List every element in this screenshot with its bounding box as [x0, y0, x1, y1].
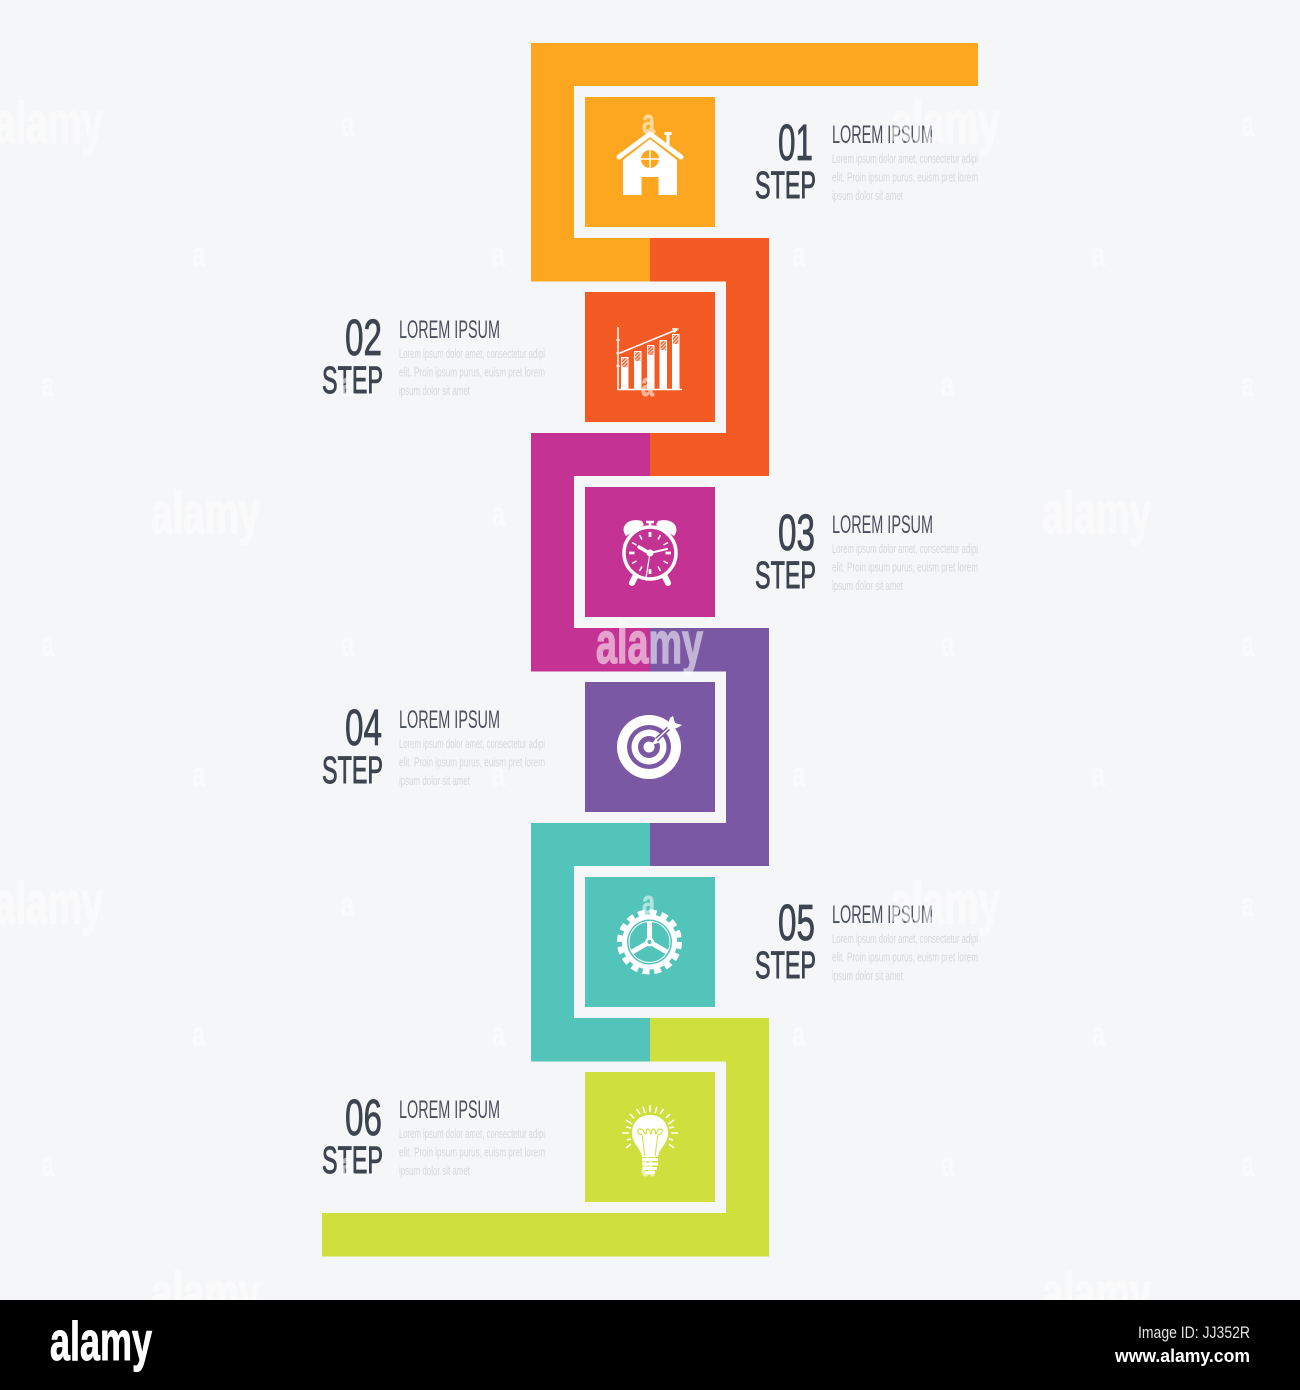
text block: step 5 [755, 894, 978, 987]
watermarks: a [1241, 1146, 1255, 1184]
connector band: step 4 purple [650, 628, 769, 866]
watermarks: alamy [1042, 481, 1151, 546]
tile: step 5 with gear icon [585, 877, 715, 1007]
watermarks: alamy [891, 871, 1000, 936]
icon: gear [620, 912, 679, 972]
text block: step 6: 06 [345, 1089, 382, 1146]
text block: step 6: ipsum dolor sit amet [399, 1163, 470, 1178]
text block: step 2: STEP [322, 360, 383, 402]
tile: step 1 with house icon [585, 97, 715, 227]
watermarks: a [792, 756, 806, 794]
text block: step 5: STEP [755, 945, 816, 987]
text block: step 3 [755, 504, 978, 597]
icon: alarm clock [624, 520, 676, 583]
watermarks: alamy [596, 611, 703, 676]
watermarks: a [642, 103, 656, 141]
watermarks: a [41, 366, 55, 404]
watermarks: a [941, 626, 955, 664]
tile: step 4 with target icon [585, 682, 715, 812]
text block: step 3: elit. Proin ipsum purus, euism pret lorem [832, 560, 978, 574]
tile: step 3 with clock icon [585, 487, 715, 617]
watermarks: a [1241, 886, 1255, 924]
watermarks: a [641, 1146, 655, 1184]
watermarks: a [192, 1016, 206, 1054]
tile: step 2 with chart icon [585, 292, 715, 422]
text block: step 6: LOREM IPSUM [399, 1096, 500, 1124]
footer image id: Image ID: JJ352R [1138, 1323, 1250, 1342]
text block: step 5: 05 [778, 894, 815, 951]
watermarks: a [192, 236, 206, 274]
footer bar [0, 1300, 1300, 1390]
text block: step 1: ipsum dolor sit amet [832, 188, 903, 203]
watermarks: a [1092, 756, 1106, 794]
connector band: step 2 red [650, 238, 769, 476]
watermarks: a [192, 756, 206, 794]
watermarks: a [1241, 626, 1255, 664]
text block: step 3: LOREM IPSUM [832, 511, 933, 539]
text block: step 2: Lorem ipsum dolor amet, consectetur adipi [399, 346, 545, 361]
watermarks: a [641, 366, 655, 404]
footer website: www.alamy.com [1114, 1346, 1250, 1366]
text block: step 1: LOREM IPSUM [832, 121, 933, 149]
watermarks: a [492, 1016, 506, 1054]
text block: step 2: ipsum dolor sit amet [399, 383, 470, 398]
text block: step 1: elit. Proin ipsum purus, euism pret lorem [832, 170, 978, 184]
watermarks: a [341, 626, 355, 664]
watermarks: a [1092, 1016, 1106, 1054]
text block: step 6: elit. Proin ipsum purus, euism pret lorem [399, 1144, 545, 1160]
connector band: step 1 orange [531, 43, 978, 282]
text block: step 2: 02 [345, 309, 382, 366]
watermarks: a [341, 106, 355, 144]
text block: step 4: Lorem ipsum dolor amet, consectetur adipi [399, 736, 545, 751]
connector band: step 5 teal [531, 823, 650, 1062]
watermarks: alamy [151, 1261, 260, 1326]
watermarks: a [941, 1146, 955, 1184]
watermarks: a [492, 236, 506, 274]
watermarks: alamy [151, 481, 260, 546]
watermarks: a [492, 496, 506, 534]
watermarks: a [792, 1016, 806, 1054]
watermarks: a [1241, 366, 1255, 404]
text block: step 5: ipsum dolor sit amet [832, 968, 903, 983]
text block: step 4: ipsum dolor sit amet [399, 773, 470, 788]
watermarks: a [1092, 236, 1106, 274]
text block: step 6: STEP [322, 1140, 383, 1182]
text block: step 4: LOREM IPSUM [399, 706, 500, 734]
text block: step 3: ipsum dolor sit amet [832, 578, 903, 593]
watermarks: a [341, 1146, 355, 1184]
text block: step 3: Lorem ipsum dolor amet, consectetur adipi [832, 541, 978, 556]
icon: house [619, 132, 681, 195]
text block: step 1: Lorem ipsum dolor amet, consectetur adipi [832, 151, 978, 166]
text block: step 4: elit. Proin ipsum purus, euism pret lorem [399, 754, 545, 770]
watermarks: a [642, 884, 656, 922]
text block: step 3: STEP [755, 555, 816, 597]
text block: step 4: 04 [345, 699, 382, 756]
text block: step 6: Lorem ipsum dolor amet, consectetur adipi [399, 1126, 545, 1141]
watermarks: a [1241, 106, 1255, 144]
text block: step 1: STEP [755, 165, 816, 207]
text block: step 5: elit. Proin ipsum purus, euism pret lorem [832, 950, 978, 964]
connector band: step 6 lime [322, 1018, 769, 1256]
text block: step 2: LOREM IPSUM [399, 316, 500, 344]
watermarks: alamy [1042, 1261, 1151, 1326]
text block: step 5: Lorem ipsum dolor amet, consectetur adipi [832, 931, 978, 946]
watermarks: a [341, 366, 355, 404]
watermarks: a [792, 236, 806, 274]
watermarks: a [41, 626, 55, 664]
text block: step 4 [322, 699, 545, 792]
text block: step 2 [322, 309, 545, 402]
icon: light bulb [622, 1105, 678, 1174]
icon: target with arrow [617, 715, 682, 779]
tile: step 6 with light bulb icon [585, 1072, 715, 1202]
watermarks: a [941, 366, 955, 404]
watermarks: a [341, 886, 355, 924]
text block: step 3: 03 [778, 504, 815, 561]
icon: bar chart [616, 327, 682, 390]
watermarks: a [492, 756, 506, 794]
connector band: step 3 magenta [531, 433, 650, 672]
text block: step 2: elit. Proin ipsum purus, euism pret lorem [399, 364, 545, 380]
text block: step 5: LOREM IPSUM [832, 901, 933, 929]
footer logo: alamy [50, 1310, 152, 1372]
watermarks: alamy [891, 91, 1000, 156]
watermarks: a [41, 1146, 55, 1184]
text block: step 1 [755, 114, 978, 207]
text block: step 4: STEP [322, 750, 383, 792]
text block: step 1: 01 [778, 114, 813, 171]
text block: step 6 [322, 1089, 545, 1182]
